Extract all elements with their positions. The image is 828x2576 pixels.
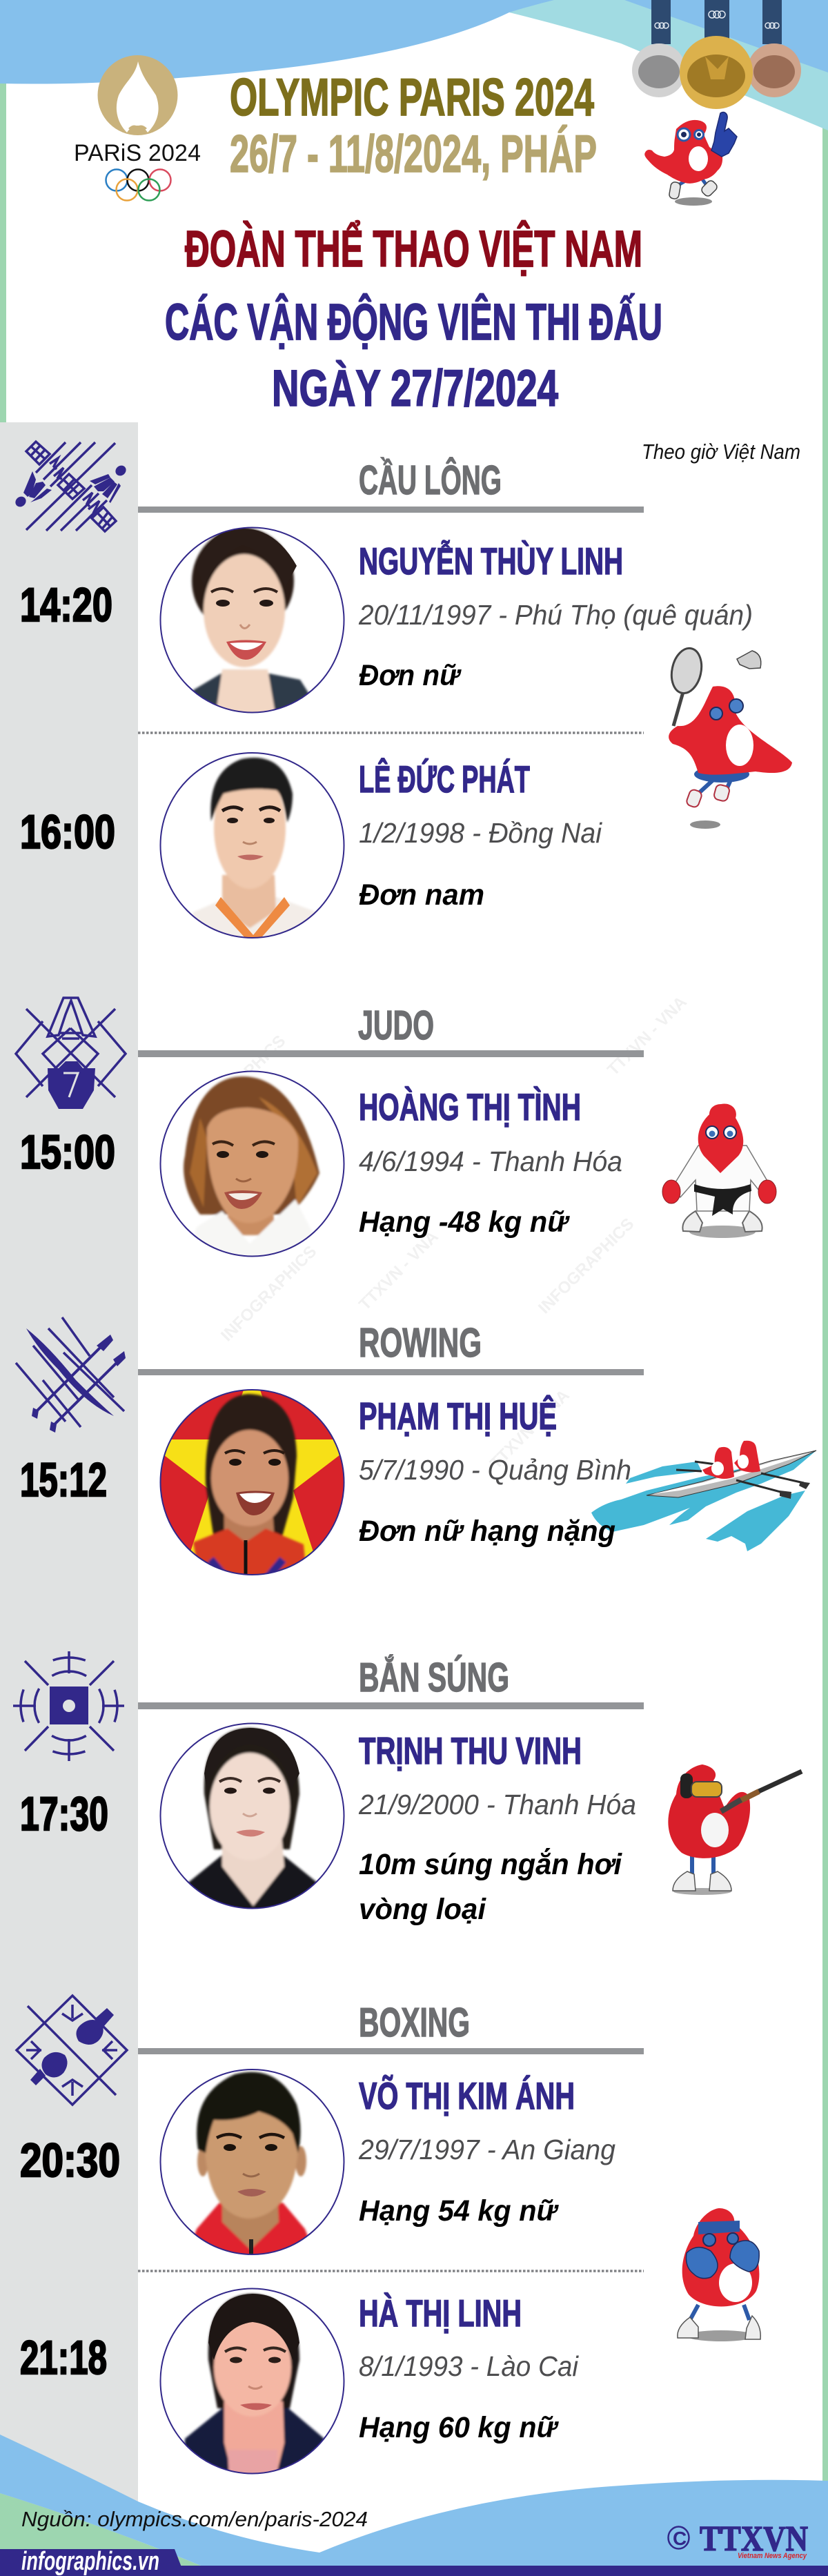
name: NGUYỄN THÙY LINH [359,540,623,582]
mascot eyes [710,699,743,720]
mascot legs [676,175,706,186]
shuttlecock [737,651,761,669]
mascot shadow [687,2330,756,2341]
athlete: Trịnh Thu Vinh [20,1724,636,1926]
foam finger [711,112,737,157]
boat hull [647,1451,816,1497]
event: Đơn nam [359,878,484,912]
heading rule [138,1702,644,1709]
mascot eyes [678,128,704,141]
athlete: Phạm Thị Huệ [20,1366,557,1580]
birth and hometown: 8/1/1993 - Lào Cai [359,2350,580,2382]
mascot legs [698,778,731,794]
athlete: Nguyễn Thùy Linh [20,527,753,718]
mascot: rowing boat [591,1441,816,1551]
medal ribbons [651,0,782,44]
top wave: blue right corner [624,0,828,72]
racket [668,645,705,726]
event: Đơn nữ hạng nặng [359,1515,615,1548]
heading: ROWING [359,1320,482,1366]
agency wordmark: TTXVN [700,2519,808,2559]
watermarks: TTXVN - VNA [355,1228,442,1314]
portrait [160,2288,344,2481]
mascot shoes [669,179,718,199]
mascot eyes [706,1126,736,1139]
birth and hometown: 1/2/1998 - Đồng Nai [359,817,603,849]
logo flame [98,55,178,135]
medals [632,0,801,109]
event: Hạng 54 kg nữ [359,2194,559,2228]
mascot shoes [685,784,731,808]
mascot: shooting [668,1764,802,1895]
shotgun [721,1771,802,1811]
heading rule [138,2048,644,2054]
mascot badge [726,725,753,766]
mascot body [669,686,792,775]
mascot: judo [662,1104,776,1238]
watermarks: INFOGRAPHICS [217,1242,320,1345]
name: HOÀNG THỊ TÌNH [359,1085,581,1128]
mascot body [644,120,722,184]
icon: boxing ring [17,1996,127,2105]
section: boxing [138,2000,644,2054]
watermarks [186,993,691,1473]
mascot badge [701,1813,729,1847]
event title: OLYMPIC PARIS 2024 [230,68,594,127]
agency tagline: Vietnam News Agency [738,2552,807,2560]
mascot shadow [689,1226,756,1238]
heading rule [138,1050,644,1057]
site name: infographics.vn [21,2547,159,2576]
oar blades [780,1482,810,1499]
heading: JUDO [358,1003,434,1048]
mascot body [682,2208,759,2306]
portrait [160,1724,344,1915]
mascot head [698,1104,743,1173]
event: Hạng -48 kg nữ [359,1206,570,1239]
bronze medal [747,43,801,97]
gold medal [680,36,753,109]
heading: BOXING [359,2000,470,2045]
time: 16:00 [20,805,115,858]
main title [165,220,662,417]
birth and hometown: 21/9/2000 - Thanh Hóa [358,1789,636,1820]
athlete: Lê Đức Phát [20,753,603,947]
black belt [694,1184,751,1216]
icon: badminton [13,442,128,531]
portrait [160,1071,344,1263]
section: rowing [138,1320,644,1375]
birth and hometown: 5/7/1990 - Quảng Bình [359,1454,631,1486]
icon: shooting target [13,1651,124,1761]
name: VÕ THỊ KIM ÁNH [359,2074,575,2117]
heading: BẮN SÚNG [359,1654,509,1700]
footer wave: green [0,2493,201,2566]
mascot legs [692,1855,713,1874]
event dates: 26/7 - 11/8/2024, PHÁP [230,125,597,184]
mascot shadow [675,197,712,206]
mascot shadow [673,1888,731,1895]
name: PHẠM THỊ HUỆ [359,1395,557,1437]
event: Hạng 60 kg nữ [359,2411,559,2444]
footer wave: blue [0,2435,828,2576]
logo: Paris 2024 [74,55,201,200]
footer band [0,2549,828,2576]
mascot shoes [673,1871,731,1891]
source: Nguồn: olympics.com/en/paris-2024 [21,2507,368,2531]
mascot shadow [690,820,720,829]
mascot shoes [678,2316,760,2339]
oars [676,1462,804,1493]
mascot body [668,1764,750,1858]
logo wordmark: PARiS 2024 [74,140,201,166]
time column panel [0,422,138,2576]
copyright mark [668,2527,689,2549]
silver medal [632,43,686,97]
mascot underside [694,766,749,783]
judo gi [673,1146,770,1211]
portrait [160,1389,345,1575]
mascot: badminton [668,645,792,829]
watermarks: INFOGRAPHICS [535,1215,638,1317]
section: judo [138,1003,644,1057]
mascot: running with foam finger [644,112,737,206]
mascot shoes [682,1211,762,1232]
portrait [160,527,344,718]
portrait [160,753,344,947]
logo: TTXVN [668,2519,808,2560]
top wave: teal [509,0,828,130]
time: 15:00 [20,1125,115,1179]
mascot badge [689,146,708,171]
boat deck [652,1453,811,1494]
section: badminton [138,457,644,513]
time: 15:12 [20,1453,107,1506]
name: TRỊNH THU VINH [359,1729,582,1772]
athlete: Hà Thị Linh [20,2288,580,2481]
mascot legs [690,2305,749,2320]
text: rowing details [359,1454,631,1548]
mascot gloves [662,1180,776,1203]
mascot badges [711,1455,749,1475]
blue headband [698,2221,740,2234]
top wave: blue [0,0,554,84]
name: LÊ ĐỨC PHÁT [359,758,530,800]
watermarks: INFOGRAPHICS [186,1032,289,1134]
time: 21:18 [20,2331,107,2384]
mascot badge [719,2263,752,2302]
heading rule [138,507,644,513]
rowing mascots [702,1441,760,1479]
dotted divider [138,2270,644,2272]
title line 3: NGÀY 27/7/2024 [272,360,558,417]
birth and hometown: 4/6/1994 - Thanh Hóa [359,1146,622,1177]
time: 20:30 [20,2134,120,2187]
dotted divider [138,731,644,734]
heading rule [138,1369,644,1375]
timezone note: Theo giờ Việt Nam [642,440,800,464]
athlete: Võ Thị Kim Ánh [20,2069,615,2260]
icon: judo [16,998,126,1109]
time: 17:30 [20,1787,108,1840]
mascot eyes [703,2233,738,2246]
copyright mark: C [673,2528,687,2549]
event [359,1847,622,1926]
headset and glasses [680,1773,722,1798]
icon: rowing [16,1317,126,1433]
name: HÀ THỊ LINH [359,2292,522,2334]
water splash [591,1451,816,1551]
watermarks: TTXVN - VNA [486,1386,573,1473]
heading: CẦU LÔNG [359,457,502,503]
ribbon rings [655,11,779,28]
section: shooting [138,1654,644,1709]
birth and hometown: 20/11/1997 - Phú Thọ (quê quán) [358,599,753,631]
event: Đơn nữ [359,659,462,692]
event: 10m súng ngắn hơi [359,1847,622,1881]
watermarks: TTXVN - VNA [604,993,691,1079]
boxing gloves [686,2241,759,2279]
event: vòng loại [359,1893,486,1926]
athlete: Hoàng Thị Tình [20,1071,622,1263]
portrait [160,2069,344,2260]
olympic rings [106,170,171,200]
mascot: boxing [678,2208,760,2341]
birth and hometown: 29/7/1997 - An Giang [358,2134,615,2165]
time: 14:20 [20,578,112,631]
